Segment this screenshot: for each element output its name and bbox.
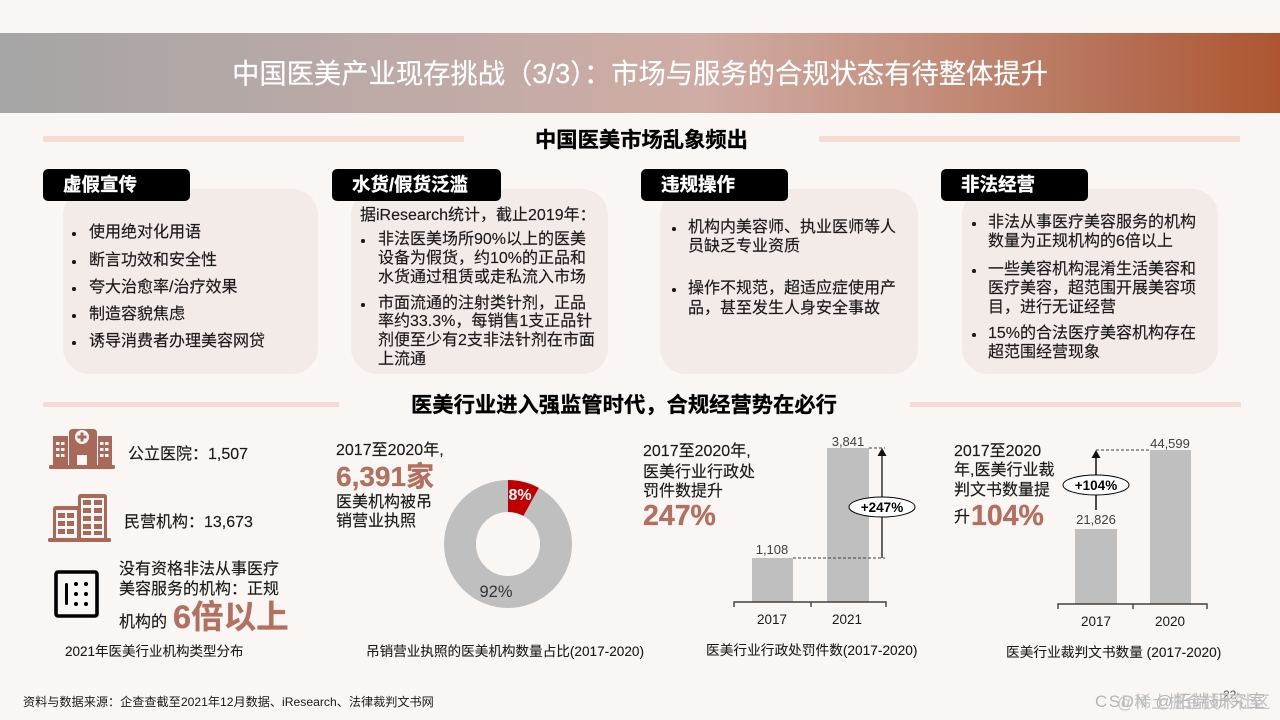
- bar chart: judgments: [1057, 436, 1208, 629]
- revoked licences text: 6,391家: [336, 461, 434, 492]
- penalties text: [643, 442, 755, 532]
- card: unlicensed business body: [962, 189, 1218, 374]
- heading: market chaos: 中国医美市场乱象频出: [535, 128, 748, 152]
- card: counterfeit goods body: 非法医美场所90%以上的医美: [378, 231, 586, 248]
- card: false advertising body: 夸大治愈率/治疗效果: [89, 279, 237, 296]
- source note: 资料与数据来源：企查查截至2021年12月数据、iResearch、法律裁判文书网: [23, 695, 434, 709]
- judgments text: 年,医美行业裁: [954, 462, 1054, 479]
- donut chart: [444, 480, 572, 608]
- card: false advertising body: [63, 189, 318, 374]
- card: counterfeit goods body: 上流通: [378, 351, 426, 368]
- panel: counterfeit goods: [332, 169, 608, 374]
- card: counterfeit goods body: 据iResearch统计，截止2019年：: [360, 207, 596, 224]
- card: illegal operation body: 员缺乏专业资质: [688, 238, 800, 255]
- card: illegal operation body: 品，甚至发生人身安全事故: [688, 300, 880, 317]
- card: false advertising body: 断言功效和安全性: [89, 252, 217, 269]
- penalties text: 罚件数提升: [643, 483, 723, 500]
- tag: illegal operation: [641, 169, 788, 201]
- tag: unlicensed business: [941, 169, 1088, 201]
- caption: revoked share: 吊销营业执照的医美机构数量占比(2017-2020): [366, 644, 644, 659]
- judgments text: 2017至2020: [954, 443, 1041, 460]
- card: unlicensed business body: 数量为正规机构的6倍以上: [988, 233, 1173, 250]
- icon: hospital: [49, 429, 115, 469]
- card: false advertising body: 使用绝对化用语: [89, 224, 201, 241]
- judgments text: 104%: [971, 500, 1044, 532]
- bar chart: judgments: 2020: [1155, 614, 1185, 629]
- public hospitals count: 公立医院：1,507: [128, 446, 248, 463]
- tag: false advertising: 虚假宣传: [63, 174, 137, 195]
- caption: penalties: 医美行业行政处罚件数(2017-2020): [706, 643, 917, 658]
- unlicensed institutions text: 没有资格非法从事医疗: [119, 561, 279, 578]
- tag: illegal operation: 违规操作: [661, 174, 735, 195]
- judgments text: 升: [954, 509, 970, 526]
- card: unlicensed business body: 医疗美容，超范围开展美容项: [988, 280, 1196, 297]
- icon: unlicensed institution: [54, 570, 99, 618]
- revoked licences text: 2017至2020年,: [336, 442, 444, 459]
- watermark: CSDN @拓端研究室: [1095, 692, 1267, 711]
- donut chart: 92%: [479, 583, 513, 601]
- card: unlicensed business body: 目，进行无证经营: [988, 299, 1116, 316]
- tag: counterfeit goods: [332, 169, 501, 201]
- panel: administrative penalties: [643, 434, 917, 658]
- panel: unlicensed business: [941, 169, 1218, 374]
- revoked licences text: [336, 441, 444, 530]
- card: illegal operation body: 操作不规范，超适应症使用产: [688, 280, 896, 297]
- bar chart: judgments: 21,826: [1076, 512, 1116, 527]
- card: false advertising body: 诱导消费者办理美容网贷: [89, 333, 265, 350]
- revoked licences text: 销营业执照: [336, 513, 416, 530]
- donut chart: 8%: [508, 487, 532, 504]
- card: counterfeit goods body: 市面流通的注射类针剂，正品: [378, 295, 586, 312]
- unlicensed institutions text: 机构的: [119, 614, 167, 631]
- heading: strong regulation era: 医美行业进入强监管时代，合规经营势在必行: [411, 393, 837, 417]
- penalties text: 医美行业行政处: [643, 464, 755, 481]
- icon: office building: [48, 494, 111, 542]
- judgments text: [954, 443, 1054, 532]
- title banner: [0, 33, 1280, 113]
- card: illegal operation body: [660, 189, 918, 374]
- bar chart: judgments: 2017: [1081, 614, 1111, 629]
- card: counterfeit goods body: 率约33.3%，每销售1支正品针: [378, 313, 592, 330]
- penalties text: 247%: [643, 500, 716, 532]
- bar chart: judgments: +104%: [1075, 478, 1117, 493]
- panel: revoked licences: [336, 441, 644, 659]
- tag: counterfeit goods: 水货/假货泛滥: [352, 174, 468, 195]
- caption: institution types: 2021年医美行业机构类型分布: [65, 644, 244, 659]
- tag: false advertising: [43, 169, 190, 201]
- bar chart: penalties: [733, 434, 916, 627]
- card: counterfeit goods body: 设备为假货，约10%的正品和: [378, 250, 586, 267]
- unlicensed institutions text: [119, 560, 289, 635]
- card: counterfeit goods body: [351, 189, 608, 374]
- page number: 22: [1223, 688, 1236, 702]
- panel: false advertising: [43, 169, 318, 374]
- panel: court judgments: [954, 436, 1221, 660]
- bar chart: penalties: 3,841: [832, 434, 864, 449]
- card: illegal operation body: 机构内美容师、执业医师等人: [688, 219, 896, 236]
- revoked licences text: 医美机构被吊: [336, 494, 432, 511]
- card: false advertising body: 制造容貌焦虑: [89, 306, 185, 323]
- bar chart: judgments: 44,599: [1150, 436, 1190, 451]
- judgments text: 判文书数量提: [954, 482, 1050, 499]
- card: counterfeit goods body: 剂便至少有2支非法针剂在市面: [378, 332, 595, 349]
- bar chart: penalties: +247%: [861, 500, 903, 515]
- card: unlicensed business body: 超范围经营现象: [988, 344, 1100, 361]
- bar chart: penalties: 2017: [757, 612, 787, 627]
- unlicensed institutions text: 6倍以上: [173, 599, 289, 635]
- watermark overlay: @稀土掘金技术社区: [1117, 693, 1270, 712]
- private institutions count: 民营机构：13,673: [124, 514, 253, 531]
- card: unlicensed business body: 15%的合法医疗美容机构存在: [988, 325, 1196, 342]
- bar chart: penalties: 1,108: [756, 542, 788, 557]
- card: unlicensed business body: 一些美容机构混淆生活美容和: [988, 261, 1196, 278]
- unlicensed institutions text: 美容服务的机构：正规: [119, 581, 279, 598]
- panel: illegal operation: [641, 169, 918, 374]
- title: 中国医美产业现存挑战（3/3）：市场与服务的合规状态有待整体提升: [232, 58, 1048, 89]
- bar chart: penalties: 2021: [832, 612, 862, 627]
- penalties text: 2017至2020年,: [643, 443, 751, 460]
- caption: judgments: 医美行业裁判文书数量 (2017-2020): [1006, 645, 1221, 660]
- panel: institution types: [48, 429, 289, 659]
- card: unlicensed business body: 非法从事医疗美容服务的机构: [988, 214, 1196, 231]
- card: counterfeit goods body: 水货通过租赁或走私流入市场: [378, 269, 586, 286]
- tag: unlicensed business: 非法经营: [961, 174, 1035, 195]
